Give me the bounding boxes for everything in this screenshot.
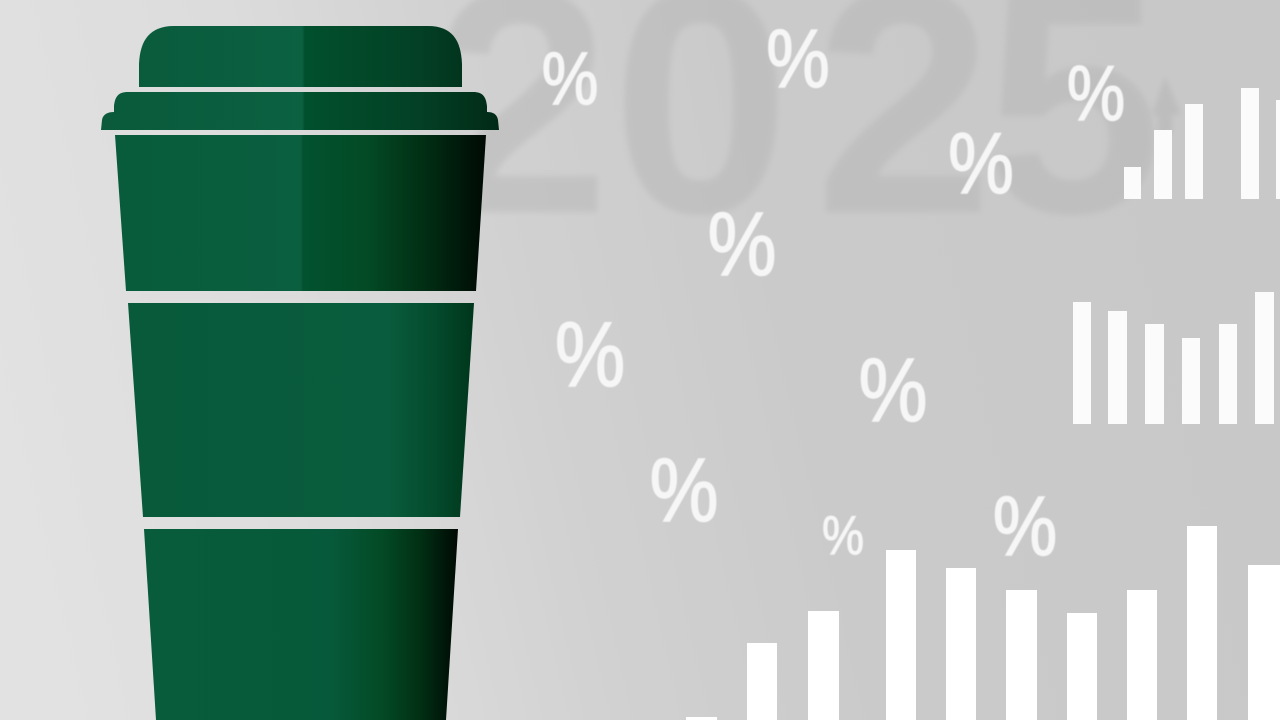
bar chart: bottom xyxy=(686,526,1280,720)
percent sign 1: % xyxy=(542,38,598,120)
percent sign 10: % xyxy=(993,479,1057,573)
cup lid top xyxy=(139,26,462,87)
percent sign 4: % xyxy=(948,115,1014,211)
percent sign 7: % xyxy=(859,340,927,440)
bar chart: top right xyxy=(1124,88,1280,199)
cup xyxy=(101,26,499,720)
cup upper section xyxy=(115,135,486,291)
cup lid rim xyxy=(101,92,499,130)
percent sign 6: % xyxy=(555,303,625,406)
percent sign 5: % xyxy=(708,194,776,294)
cup middle section xyxy=(128,303,474,517)
bar chart: middle right xyxy=(1073,292,1274,424)
percent sign 3: % xyxy=(1067,51,1125,137)
percent sign 8: % xyxy=(650,440,718,540)
cup lower section xyxy=(144,529,458,720)
percent sign 2: % xyxy=(766,13,830,105)
percent sign 9: % xyxy=(822,505,864,566)
ghost arrow xyxy=(1152,76,1181,135)
